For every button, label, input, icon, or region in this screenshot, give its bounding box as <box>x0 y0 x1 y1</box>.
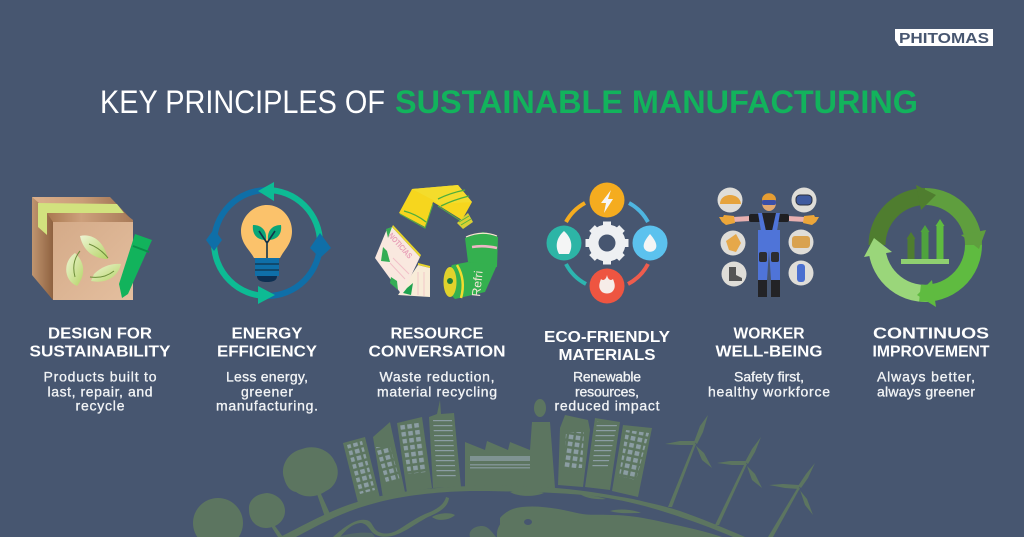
description: greener <box>241 384 293 400</box>
heading: SUSTAINABILITY <box>30 344 171 360</box>
description: material recycling <box>377 384 497 400</box>
heading: MATERIALS <box>558 347 656 364</box>
heading: WELL-BEING <box>716 344 822 360</box>
description: resources, <box>575 384 639 400</box>
panel: resource conversation <box>368 185 506 400</box>
icon: light bulb with plant in circular arrows <box>206 182 331 304</box>
description: recycle <box>76 398 125 414</box>
heading <box>217 326 317 360</box>
heading <box>716 326 822 360</box>
heading: ECO-FRIENDLY <box>544 329 670 346</box>
description: Waste reduction, <box>380 368 494 384</box>
heading: ENERGY <box>232 326 303 342</box>
description <box>216 368 318 414</box>
city buildings <box>343 399 652 503</box>
description: healthy workforce <box>708 384 830 400</box>
heading <box>30 326 171 360</box>
description: Always better, <box>877 368 975 384</box>
description: manufacturing. <box>216 398 318 414</box>
logo: PHITOMAS <box>899 30 989 47</box>
title: KEY PRINCIPLES OF <box>100 84 385 120</box>
globe <box>280 486 745 537</box>
description <box>877 368 975 400</box>
panel: worker well-being <box>708 188 830 400</box>
description: Less energy, <box>226 368 308 384</box>
title: SUSTAINABLE MANUFACTURING <box>395 84 918 120</box>
icon: cardboard box with recycling leaves and pencil <box>32 197 152 300</box>
title <box>100 84 918 120</box>
panel: continuos improvement <box>864 185 990 400</box>
description: last, repair, and <box>48 384 152 400</box>
heading: WORKER <box>734 326 805 342</box>
icon: recycling triangle of waste items: NOTICIAS <box>387 231 414 261</box>
icon: recycling triangle of waste items: Refri <box>469 270 486 297</box>
description: always greener <box>877 384 975 400</box>
description <box>44 368 157 414</box>
heading: EFFICIENCY <box>217 344 317 360</box>
trees <box>193 447 338 537</box>
panel: energy efficiency <box>206 182 331 414</box>
heading: RESOURCE <box>390 326 484 342</box>
heading <box>872 326 990 360</box>
background illustration: green city on globe <box>193 399 815 537</box>
panel: eco-friendly materials <box>544 182 670 414</box>
heading: DESIGN FOR <box>48 326 152 342</box>
heading: CONTINUOS <box>873 326 989 342</box>
description: Products built to <box>44 368 157 384</box>
description <box>708 368 830 400</box>
description <box>554 368 660 414</box>
icon: gear ringed by four element circles <box>546 182 668 304</box>
icon: recycling triangle of waste items <box>375 185 498 299</box>
wind turbines <box>665 415 815 537</box>
description: Safety first, <box>734 368 804 384</box>
description: Renewable <box>573 368 641 384</box>
heading: CONVERSATION <box>368 344 506 360</box>
heading <box>368 326 506 360</box>
icon: worker with protective equipment <box>718 188 819 297</box>
description <box>377 368 497 400</box>
description: reduced impact <box>554 398 660 414</box>
heading: IMPROVEMENT <box>872 344 990 360</box>
icon: green cycle arrows with rising bars <box>864 185 986 307</box>
heading <box>544 329 670 364</box>
panel: design for sustainability <box>30 197 171 414</box>
